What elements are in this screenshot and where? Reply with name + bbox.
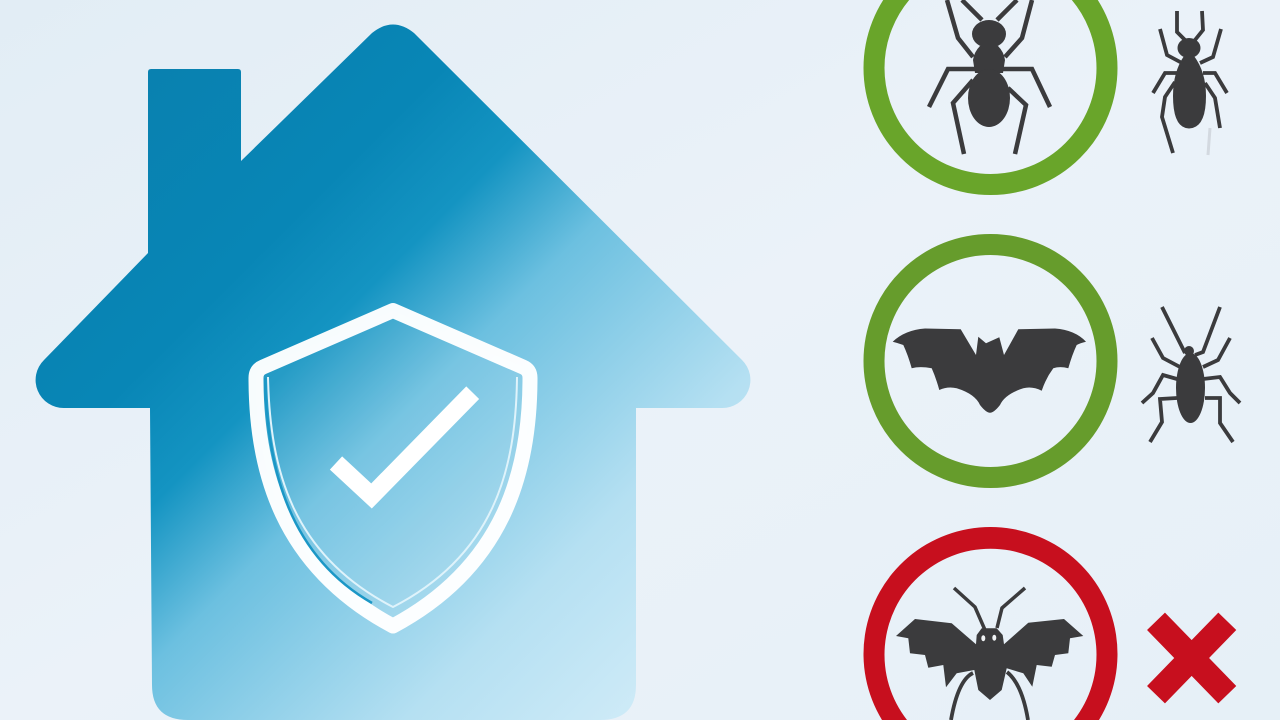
insect lower legs — [951, 672, 1028, 720]
icon: cockroach — [1142, 307, 1240, 442]
green ring — [874, 0, 1107, 184]
icon: red cross — [1156, 621, 1227, 695]
row 3: bat-winged insect in red ring with red cross — [863, 527, 1227, 720]
red ring — [863, 527, 1118, 720]
shield inner thin outline — [268, 377, 517, 607]
shield — [256, 310, 530, 626]
row 2: bat in green ring with cockroach — [874, 244, 1240, 478]
icon: bat — [893, 328, 1086, 413]
row 1: ant in green ring with beetle — [874, 0, 1227, 184]
insect body and wings — [896, 619, 1083, 700]
shield translucent face and outer band — [256, 310, 530, 626]
icon: winged insect — [896, 588, 1083, 720]
icon: ant — [929, 0, 1050, 154]
check mark — [336, 393, 473, 496]
insect eyes — [981, 635, 996, 641]
green ring — [874, 244, 1107, 478]
house with shield — [36, 24, 750, 720]
icon: beetle — [1153, 11, 1227, 155]
shield inner dark edge — [265, 378, 372, 603]
insect antennae — [954, 588, 1025, 630]
house silhouette with chimney — [36, 24, 750, 720]
